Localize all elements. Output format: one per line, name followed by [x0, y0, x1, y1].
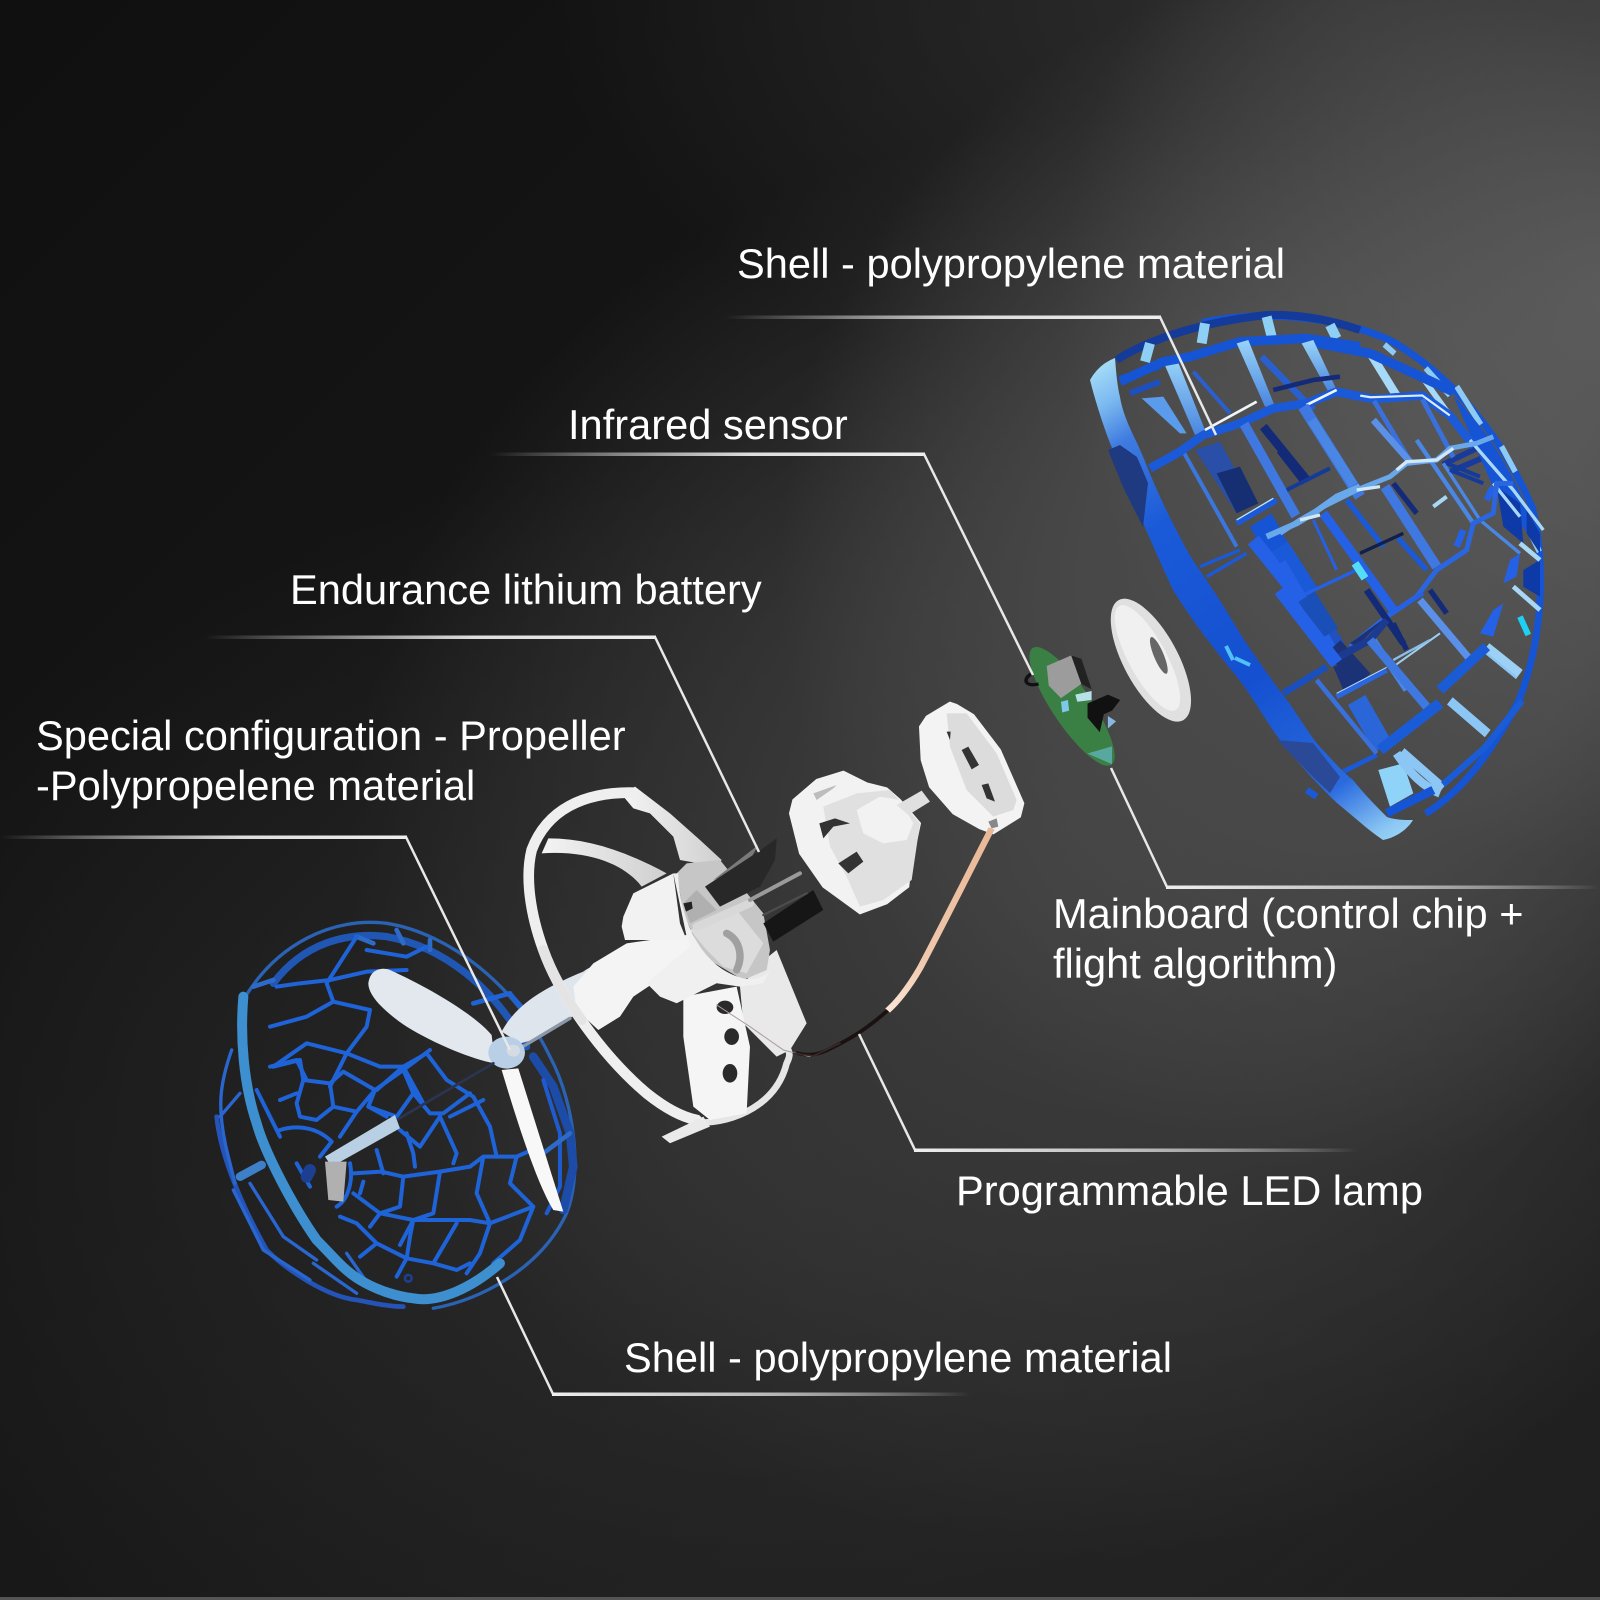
label: mainboard: Mainboard (control chip +	[1053, 890, 1524, 937]
ring front section over the blade	[543, 950, 582, 1020]
label: top shell: Shell - polypropylene material	[737, 240, 1285, 287]
label: bottom shell: Shell - polypropylene material	[624, 1334, 1172, 1381]
lower crop details	[1280, 590, 1440, 813]
foot	[662, 1117, 710, 1143]
shell: blue upper hemisphere	[1090, 315, 1543, 840]
label: mainboard: flight algorithm)	[1053, 940, 1337, 987]
label: LED lamp: Programmable LED lamp	[956, 1167, 1423, 1214]
leader: LED lamp	[859, 1034, 1357, 1152]
upper mesh cells	[270, 937, 540, 1273]
dome outline	[243, 922, 575, 1308]
label: propeller: -Polypropelene material	[36, 762, 475, 809]
propeller guard ring and central body	[529, 787, 840, 1143]
screw and cylinder	[697, 903, 750, 927]
strap with holes	[683, 987, 750, 1120]
mainboard PCB with infrared sensor	[1016, 639, 1128, 774]
leader: top shell	[725, 316, 1216, 435]
wing blade	[573, 935, 697, 1030]
leader: infrared sensor	[490, 452, 1033, 675]
front rim	[242, 997, 500, 1299]
thin wire	[717, 1005, 810, 1057]
leader: battery	[204, 636, 759, 852]
upper band	[623, 787, 722, 867]
spoke	[542, 838, 667, 887]
ring	[529, 793, 697, 1120]
propeller blades, hub and shaft	[325, 966, 603, 1212]
cone opening	[677, 860, 770, 980]
lower mesh cells	[217, 997, 500, 1307]
leader: propeller	[0, 836, 510, 1050]
LED diffuser ring	[1095, 586, 1207, 734]
LED flexible strip	[796, 828, 992, 1055]
top-right mesh	[1202, 316, 1541, 814]
label: propeller: Special configuration - Propeller	[36, 712, 626, 759]
outer band and lattice	[217, 1117, 403, 1307]
upper-left crop details	[1117, 315, 1360, 590]
rim band	[1090, 358, 1413, 840]
leader: mainboard	[1111, 768, 1600, 889]
body lobe	[622, 873, 687, 940]
battery	[713, 845, 758, 880]
shell: blue lower hemisphere	[217, 922, 575, 1308]
lower right wing	[740, 950, 807, 1057]
label: battery: Endurance lithium battery	[290, 566, 762, 613]
leader: bottom shell	[497, 1277, 970, 1396]
motor and motor housing cap	[790, 703, 1023, 913]
motor	[790, 772, 920, 913]
cone outer wall	[647, 873, 770, 1003]
cap	[920, 703, 1023, 833]
label: infrared sensor: Infrared sensor	[568, 401, 848, 448]
right crop details	[1280, 420, 1543, 690]
